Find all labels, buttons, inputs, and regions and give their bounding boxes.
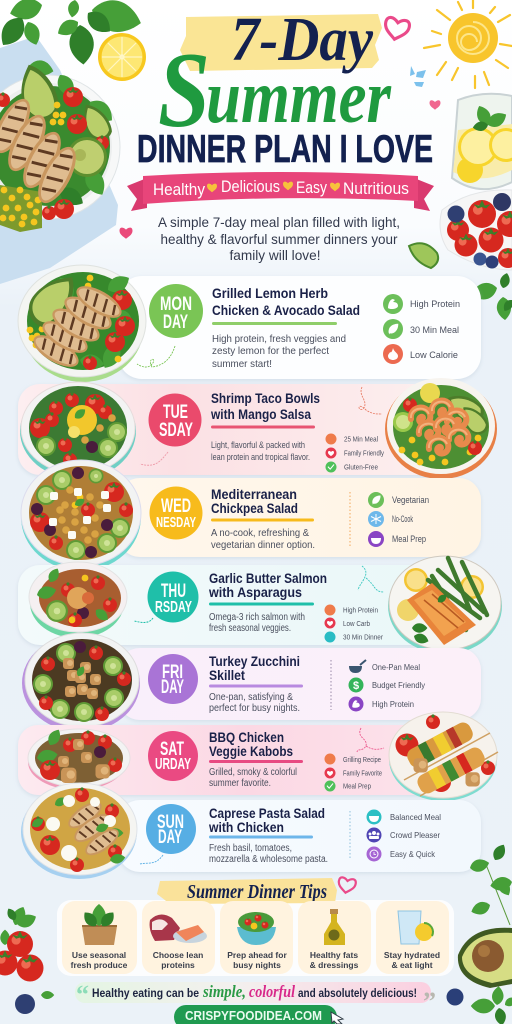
meal title: Chickpea Salad [211, 500, 298, 516]
badge: high protein [348, 696, 414, 712]
day badge: DAY [158, 827, 182, 848]
title: 7-Day brush highlight [180, 14, 382, 71]
description [209, 612, 305, 634]
quote band [75, 980, 436, 1016]
badge: 30 min meal: 30 Min Meal [410, 325, 459, 335]
day badge [148, 394, 202, 446]
badge: vegetarian: Vegetarian [392, 495, 429, 505]
tip: healthy fats [298, 901, 371, 974]
meal title: Skillet [209, 667, 245, 683]
dotted divider [349, 811, 351, 860]
description: Fresh basil, tomatoes, [209, 843, 292, 854]
blue linen cloth [0, 36, 118, 284]
description: perfect for busy nights. [209, 703, 300, 714]
badge: meal prep: Meal Prep [392, 534, 426, 544]
day badge: DAY [161, 677, 184, 698]
lemon slice [98, 33, 146, 81]
badge: no-cook: No-Cook [392, 514, 413, 524]
description [209, 843, 328, 865]
tip: lean proteins: Choose lean [153, 950, 203, 960]
card [118, 478, 481, 557]
tip: seasonal produce: fresh produce [71, 960, 128, 970]
badge: meal prep [324, 780, 371, 792]
badge: grilling recipe: Grilling Recipe [343, 757, 381, 764]
meal title [212, 285, 360, 318]
badge: grilling recipe [324, 754, 381, 764]
dotted divider [330, 660, 332, 710]
meal title: Garlic Butter Salmon [209, 570, 327, 586]
badge: balanced meal: Balanced Meal [390, 812, 441, 822]
meal title: Grilled Lemon Herb [212, 285, 328, 301]
tip: hydration [376, 901, 449, 974]
title: 7-Day: 7-Day [231, 6, 373, 74]
tips heart [337, 877, 356, 894]
meal bowl: chicken salad [28, 727, 130, 790]
day badge: URDAY [155, 756, 191, 773]
strawberry and blueberry bowl [440, 190, 512, 270]
ribbon banner: Healthy [153, 180, 205, 199]
underline [209, 602, 314, 606]
badge: budget friendly [348, 678, 426, 692]
tip: seasonal produce: Use seasonal [72, 950, 126, 960]
badge: high protein [324, 604, 378, 616]
meal title [208, 570, 327, 600]
day badge: THU [161, 581, 186, 602]
meal title: Turkey Zucchini [209, 653, 300, 669]
description: summer start! [212, 358, 272, 370]
basil sprig top left [0, 0, 145, 66]
panel: Friday [22, 633, 481, 732]
meal title [209, 653, 300, 683]
panel: Saturday [18, 712, 498, 801]
description: High protein, fresh veggies and [212, 333, 346, 345]
meal plate: salmon [388, 556, 502, 654]
badge: 30 min meal [383, 319, 459, 339]
meal title: BBQ Chicken [209, 729, 284, 745]
day badge: RSDAY [155, 599, 192, 616]
description: Light, flavorful & packed with [211, 440, 305, 451]
ribbon banner [127, 172, 434, 211]
panel: Sunday [21, 783, 481, 879]
day badge [148, 654, 198, 704]
basil right [469, 272, 512, 321]
basil bottom right [471, 986, 512, 1024]
badge: low calorie [383, 344, 458, 364]
badge: 30 min dinner: 30 Min Dinner [343, 634, 384, 642]
cursor icon [331, 1012, 343, 1024]
badge: gluten-free [326, 462, 378, 472]
meal bowl: mixed salad [20, 382, 136, 479]
heart top [383, 17, 410, 42]
day badge [148, 572, 198, 622]
badge: meal prep [368, 531, 426, 547]
blueberry left [15, 994, 35, 1014]
underline [212, 322, 337, 325]
card [118, 800, 481, 872]
description [209, 767, 297, 789]
badge: meal prep: Meal Prep [343, 784, 371, 790]
meal title: with Chicken [208, 819, 284, 835]
card [118, 648, 481, 720]
dashed arrow right [357, 728, 384, 752]
meal title [209, 729, 293, 759]
meal title: Caprese Pasta Salad [209, 805, 325, 821]
badge: crowd pleaser: Crowd Pleaser [390, 830, 440, 840]
dashed arrow right [358, 566, 384, 592]
badge: low carb: Low Carb [343, 621, 370, 628]
tip: seasonal produce [62, 901, 137, 974]
website button: CRISPYFOODIDEA.COM [185, 1009, 322, 1023]
description: fresh seasonal veggies. [209, 623, 291, 634]
description [209, 692, 300, 714]
hero salad bowl with chicken [0, 58, 120, 232]
ribbon banner: Delicious [221, 177, 280, 196]
tips heading: Summer Dinner Tips [187, 881, 327, 903]
blueberry right [446, 988, 464, 1006]
dashed arrow [134, 618, 153, 622]
description: Grilled, smoky & colorful [209, 767, 297, 778]
ribbon banner: Easy [296, 178, 327, 197]
panel: Monday [18, 265, 481, 382]
description: lean protein and tropical flavor. [211, 452, 310, 463]
panel: Wednesday [21, 460, 481, 571]
quote band: “ [76, 980, 89, 1009]
quote band: ” [423, 987, 436, 1016]
meal title: Mediterranean [211, 486, 297, 502]
water splash doodle [410, 66, 426, 87]
meal title [211, 486, 298, 516]
dashed arrow [140, 855, 163, 864]
description [211, 527, 315, 551]
meal bowl: shrimp taco [385, 378, 497, 479]
description: zesty lemon for the perfect [212, 345, 329, 357]
meal plate: kabobs [389, 712, 498, 801]
tip: lean proteins [142, 901, 215, 974]
day badge: SAT [160, 739, 184, 760]
quote band: colorful [249, 982, 295, 1001]
badge: balanced meal [366, 810, 441, 824]
right basil sprig bottom [468, 842, 512, 925]
badge: family favorite: Family Favorite [343, 770, 382, 778]
card [18, 384, 470, 475]
day badge: MON [160, 294, 192, 315]
tip: healthy fats: Healthy fats [310, 950, 358, 960]
badge: one-pan meal: One-Pan Meal [372, 662, 420, 672]
badge: budget friendly: $ [353, 680, 359, 692]
description: vegetarian dinner option. [211, 539, 315, 551]
underline [209, 836, 313, 838]
day badge: TUE [163, 402, 188, 423]
panel: Tuesday [18, 378, 497, 479]
tomatoes and leaves bottom left [0, 904, 44, 982]
description [211, 440, 310, 463]
meal title: Veggie Kabobs [209, 743, 293, 759]
underline [209, 684, 303, 688]
title: Summer: S [158, 31, 210, 150]
dashed arrow [140, 452, 168, 465]
underline [211, 518, 314, 522]
badge: 25 min meal [326, 434, 378, 444]
tips panel background [57, 900, 454, 976]
description: summer favorite. [209, 778, 271, 789]
day badge [150, 486, 202, 540]
small leaf [41, 991, 54, 999]
quote band: simple, [202, 982, 246, 1001]
description [212, 333, 346, 370]
meal title [210, 390, 320, 422]
meal title: Chicken & Avocado Salad [212, 302, 360, 318]
dotted divider [349, 492, 351, 546]
tips heading brush [157, 878, 337, 904]
badge: easy and quick [366, 846, 436, 862]
website button [174, 1005, 337, 1024]
card [18, 565, 480, 645]
day badge: WED [161, 496, 191, 517]
tip: hydration: Stay hydrated [384, 950, 440, 960]
meal bowl: chicken avocado salad [18, 265, 146, 382]
badge: gluten-free: Gluten-Free [344, 464, 378, 472]
description: mozzarella & wholesome pasta. [209, 854, 328, 865]
meal title: Shrimp Taco Bowls [211, 390, 320, 406]
badge: vegetarian [368, 492, 429, 508]
quote band: Healthy eating can be [92, 988, 199, 1000]
title: Summer [158, 31, 392, 150]
badge: no-cook [368, 511, 413, 527]
badge: budget friendly: Budget Friendly [372, 680, 426, 690]
day badge [148, 731, 198, 781]
tip: prep ahead: Prep ahead for [227, 950, 287, 960]
lemon water glass [452, 94, 512, 189]
cucumber slice [409, 243, 438, 268]
meal bowl: caprese pasta [21, 783, 137, 879]
badge: crowd pleaser [366, 828, 440, 842]
badge: high protein: High Protein [372, 699, 414, 709]
underline [211, 426, 315, 428]
intro text: family will love! [230, 247, 320, 263]
title: Summer: ummer [206, 55, 392, 139]
meal title: with Mango Salsa [210, 406, 311, 422]
description: A no-cook, refreshing & [211, 527, 309, 539]
badge: family favorite [324, 768, 382, 778]
meal bowl: chickpea salad [21, 460, 141, 571]
description: Omega-3 rich salmon with [209, 612, 305, 623]
badge: family friendly [326, 448, 384, 458]
badge: low calorie: Low Calorie [410, 350, 458, 360]
badge: family friendly: Family Friendly [344, 450, 384, 458]
badge: 30 min dinner [324, 632, 384, 642]
intro text: A simple 7-day meal plan filled with light, [158, 214, 400, 230]
ribbon banner: Nutritious [343, 179, 409, 198]
badge: high protein [383, 294, 460, 314]
badge: 25 min meal: 25 Min Meal [344, 436, 378, 444]
tip: healthy fats: & dressings [310, 960, 359, 970]
heart left [120, 228, 132, 239]
day badge: SUN [157, 812, 184, 833]
dashed arrow right [359, 387, 382, 414]
tip: prep ahead: busy nights [233, 960, 281, 970]
day badge [149, 284, 203, 338]
badge: easy and quick: Easy & Quick [390, 849, 436, 859]
underline [209, 760, 303, 763]
meal bowl: colorful salad [29, 562, 127, 638]
panel: Thursday [18, 556, 502, 654]
badge: low carb [324, 618, 370, 628]
meal bowl: turkey zucchini skillet [22, 633, 140, 732]
day badge [146, 804, 196, 854]
heart small [430, 100, 440, 110]
avocado half [458, 928, 512, 988]
description: One-pan, satisfying & [209, 692, 293, 703]
dashed arrow [137, 346, 175, 367]
day badge: NESDAY [156, 514, 196, 531]
meal title: with Asparagus [208, 584, 302, 600]
quote band: and absolutely delicious! [298, 988, 417, 1000]
day badge: DAY [163, 312, 188, 333]
card [18, 725, 470, 795]
badge: one-pan meal [349, 660, 420, 673]
meal title [208, 805, 325, 835]
tip: lean proteins: proteins [161, 960, 195, 970]
intro text: healthy & flavorful summer dinners your [160, 231, 398, 247]
day badge: SDAY [159, 420, 193, 441]
tip: prep ahead [220, 901, 293, 974]
sun doodle [424, 0, 512, 88]
day badge: FRI [162, 662, 183, 683]
tip: hydration: & eat light [391, 960, 433, 970]
intro text [158, 214, 400, 263]
badge: high protein: High Protein [343, 608, 378, 614]
card [118, 276, 481, 379]
badge: high protein: High Protein [410, 299, 460, 309]
